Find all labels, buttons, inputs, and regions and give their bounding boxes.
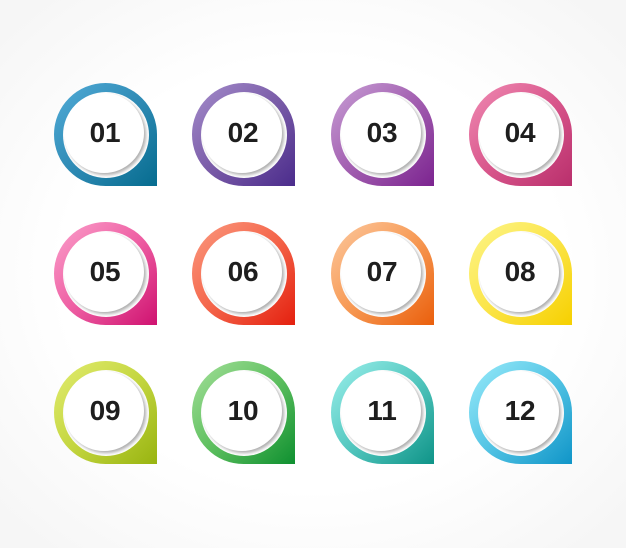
marker 01: 01: [90, 117, 120, 148]
marker 08: [469, 222, 572, 325]
marker 10: 10: [228, 395, 258, 426]
marker 03: 03: [367, 117, 397, 148]
marker 08: 08: [505, 256, 535, 287]
marker 07: [331, 222, 434, 325]
marker 06: [192, 222, 295, 325]
marker 05: [54, 222, 157, 325]
marker 12: [469, 361, 572, 464]
marker 03: [331, 83, 434, 186]
marker 11: [331, 361, 434, 464]
marker 11: 11: [367, 395, 397, 426]
marker 04: [469, 83, 572, 186]
marker 02: [192, 83, 295, 186]
marker 07: 07: [367, 256, 397, 287]
marker 06: 06: [228, 256, 258, 287]
marker 05: 05: [90, 256, 120, 287]
marker 10: [192, 361, 295, 464]
marker 01: [54, 83, 157, 186]
marker 09: [54, 361, 157, 464]
marker 12: 12: [505, 395, 535, 426]
marker 04: 04: [505, 117, 535, 148]
marker 02: 02: [228, 117, 258, 148]
marker 09: 09: [90, 395, 120, 426]
